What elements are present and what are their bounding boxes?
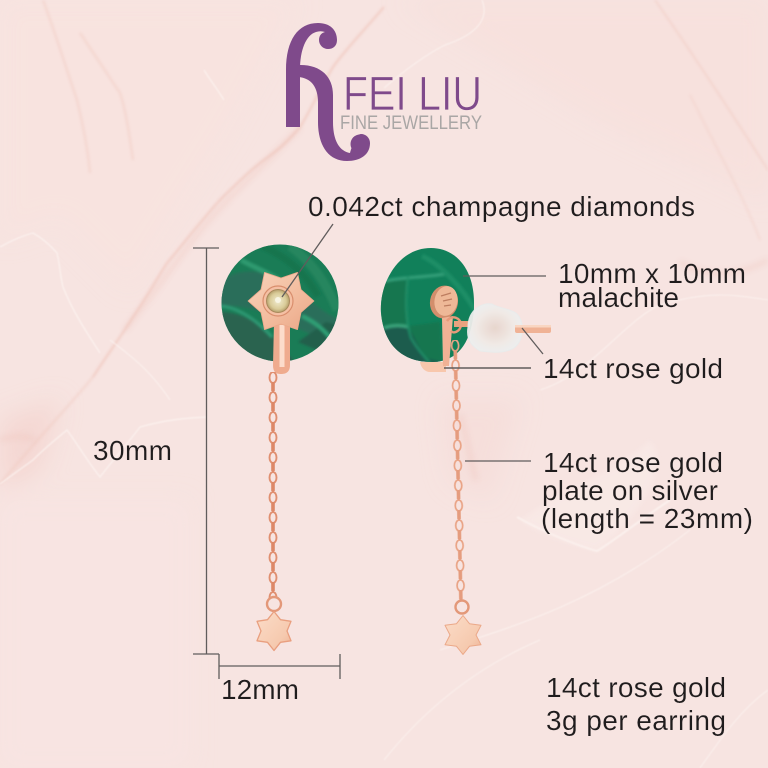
label: chain: 14ct rose gold — [543, 447, 723, 478]
leader: diamonds — [282, 224, 333, 297]
label: stone: malachite — [558, 282, 679, 313]
star charm — [257, 612, 291, 650]
leader: post — [522, 328, 543, 354]
marble veins: pink — [0, 0, 768, 484]
side earring — [378, 248, 551, 654]
leader: malachite — [463, 275, 546, 277]
diamond in bezel — [263, 286, 293, 316]
star charm — [445, 616, 481, 654]
logo wordmark: FEI LIU — [343, 68, 482, 121]
label: stone — [558, 258, 746, 313]
label: width: 12mm — [221, 674, 299, 705]
label: post metal: 14ct rose gold — [543, 353, 723, 384]
front earring — [215, 244, 345, 650]
jump ring — [456, 600, 468, 614]
chain — [450, 340, 470, 600]
dimension and leader lines — [193, 224, 546, 679]
label: diamonds: 0.042ct champagne diamonds — [308, 191, 695, 222]
bracket — [442, 316, 470, 366]
12mm dimension line — [219, 654, 340, 679]
malachite side view — [378, 248, 476, 366]
star setting — [248, 272, 314, 330]
label: material and weight — [546, 672, 726, 736]
label: height: 30mm — [93, 435, 172, 466]
label: chain: (length = 23mm) — [541, 503, 753, 534]
label: stone: 10mm x 10mm — [558, 258, 746, 289]
leader: rose gold — [444, 367, 531, 369]
30mm dimension line — [193, 248, 219, 654]
silicone back — [468, 304, 522, 352]
logo monogram — [286, 23, 370, 161]
leader: chain — [465, 460, 531, 462]
back disc — [427, 283, 461, 321]
jump ring — [267, 597, 281, 611]
post — [515, 325, 551, 333]
label: material and weight: 3g per earring — [546, 705, 726, 736]
logo: Fei Liu Fine Jewellery — [286, 23, 482, 161]
post and bail — [273, 322, 290, 374]
label: chain: plate on silver — [542, 475, 718, 506]
logo tagline: FINE JEWELLERY — [340, 113, 482, 134]
chain — [266, 372, 280, 598]
malachite disc — [222, 244, 338, 362]
base plate — [420, 362, 446, 372]
label: chain — [541, 447, 753, 534]
label: material and weight: 14ct rose gold — [546, 672, 726, 703]
